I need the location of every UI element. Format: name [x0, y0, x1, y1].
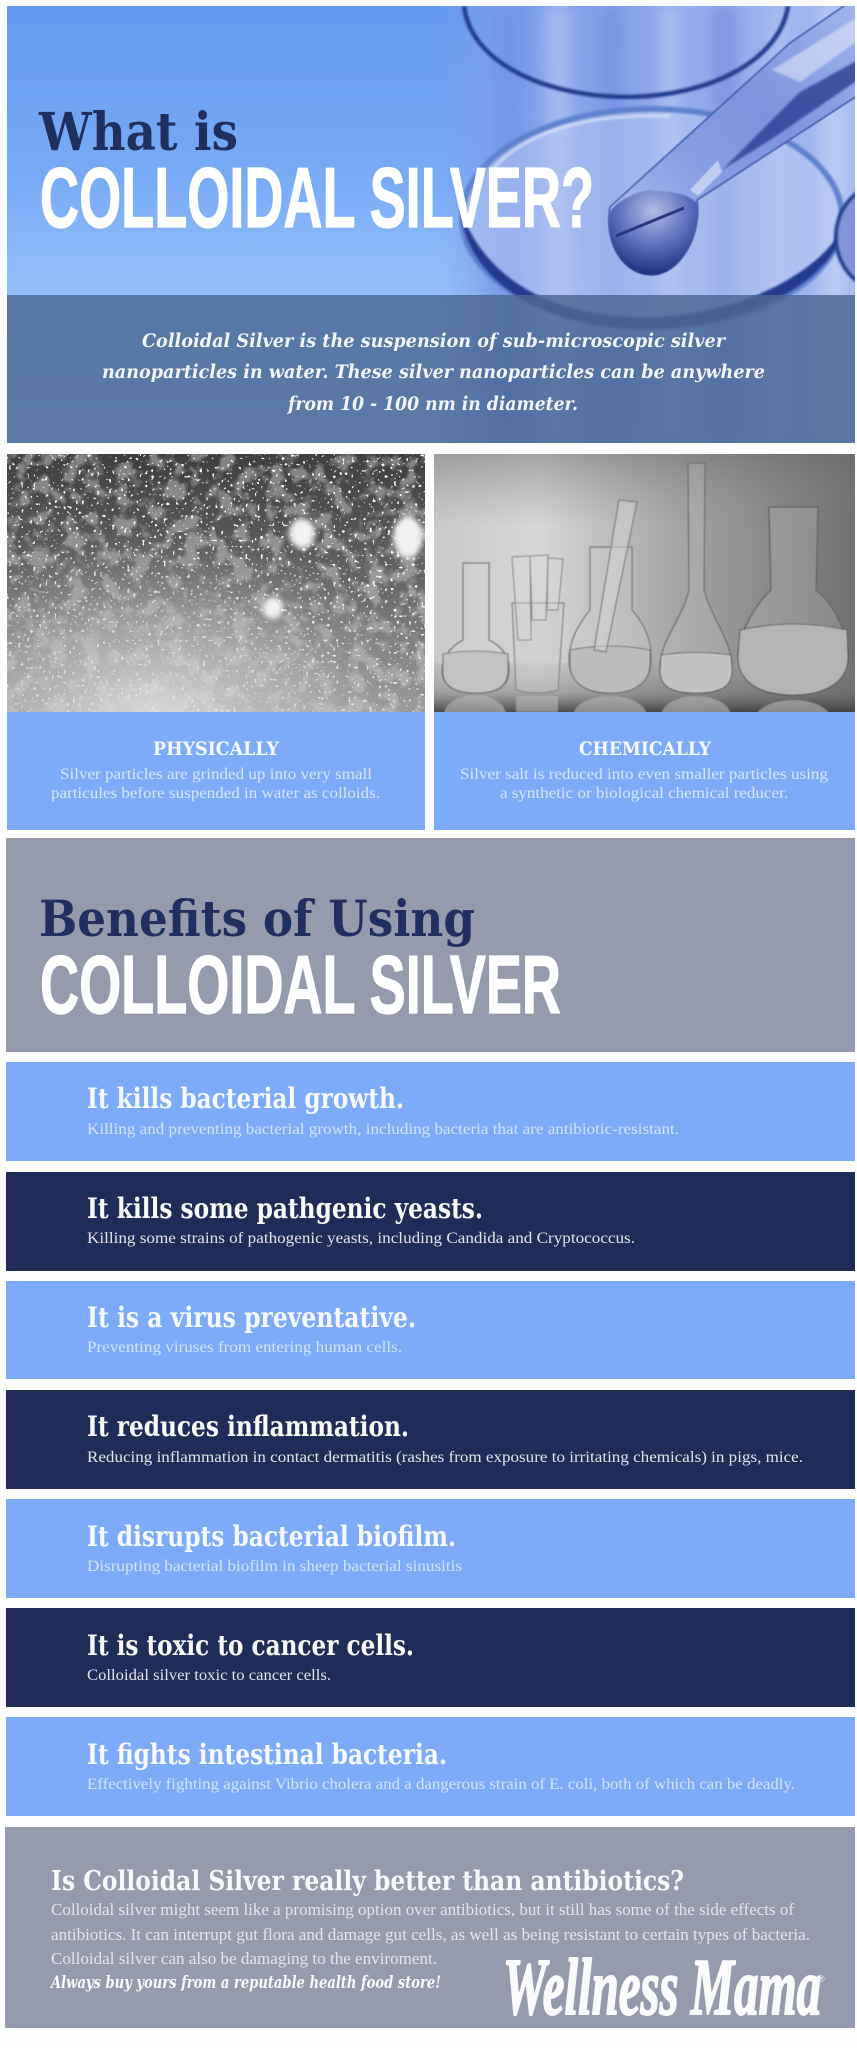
right vessel edge — [836, 185, 857, 289]
caption background — [434, 712, 855, 830]
body text: Colloidal silver can also be damaging to the enviroment. — [51, 1949, 437, 1968]
benefit 7: It fights intestinal bacteria. — [87, 1738, 447, 1771]
photo: silver particles — [7, 454, 425, 712]
flask A — [442, 563, 509, 693]
logo: Wellness Mama: ® — [818, 1974, 825, 1984]
definition text: from 10 - 100 nm in diameter. — [286, 393, 578, 415]
benefit 2: It kills some pathgenic yeasts. — [87, 1192, 483, 1225]
heading: Benefits of Using: Benefits of Using — [39, 889, 475, 948]
benefit 6: Colloidal silver toxic to cancer cells. — [87, 1667, 331, 1684]
panel: chemically — [434, 454, 855, 830]
benefit 2: Killing some strains of pathogenic yeasts, including Candida and Cryptococcus. — [87, 1230, 635, 1247]
translucent caption band — [7, 295, 855, 443]
hero photo: glassware — [7, 0, 857, 443]
body text — [51, 1900, 810, 1968]
heading: Physically: PHYSICALLY — [153, 738, 279, 760]
test tube — [609, 0, 857, 275]
description: a synthetic or biological chemical reducer. — [500, 785, 788, 802]
benefit 1 — [6, 1062, 855, 1161]
benefit 4: It reduces inflammation. — [87, 1410, 409, 1443]
back beaker rim — [464, 6, 788, 97]
benefit 7 — [6, 1717, 855, 1816]
benefit 3: Preventing viruses from entering human cells. — [87, 1339, 402, 1356]
description: Silver salt is reduced into even smaller particles using — [460, 766, 828, 783]
benefit 1: It kills bacterial growth. — [87, 1082, 404, 1115]
benefit 3 — [6, 1281, 855, 1379]
heading: What is: What is — [38, 102, 238, 163]
panel: antibiotics comparison — [5, 1827, 855, 2032]
definition text: nanoparticles in water. These silver nanoparticles can be anywhere — [102, 361, 765, 383]
flask C — [569, 547, 651, 693]
description: particules before suspended in water as colloids. — [51, 785, 380, 802]
body text: Colloidal silver might seem like a promising option over antibiotics, but it still has some of the side effects of — [51, 1900, 794, 1919]
definition text: Colloidal Silver is the suspension of sub-microscopic silver — [142, 330, 727, 352]
flask D — [660, 463, 732, 693]
heading: Chemically: CHEMICALLY — [579, 738, 711, 760]
body text: antibiotics. It can interrupt gut flora and damage gut cells, as well as being resistant to certain types of bacteria. — [51, 1925, 810, 1944]
panel: physically — [7, 454, 425, 830]
benefit 5: It disrupts bacterial biofilm. — [87, 1520, 456, 1553]
call to action: Always buy yours from a reputable health food store! — [49, 1973, 441, 1993]
benefit 1: Killing and preventing bacterial growth, including bacteria that are antibiotic-resistant. — [87, 1121, 679, 1138]
benefit 7: Effectively fighting against Vibrio cholera and a dangerous strain of E. coli, both of which can be deadly. — [87, 1776, 795, 1793]
heading: Colloidal Silver: COLLOIDAL SILVER — [40, 938, 561, 1031]
description — [51, 766, 380, 802]
reflections — [444, 695, 829, 712]
benefit 5: Disrupting bacterial biofilm in sheep bacterial sinusitis — [87, 1558, 462, 1575]
heading: Is Colloidal Silver really better than antibiotics? — [51, 1866, 684, 1897]
description: Silver particles are grinded up into very small — [60, 766, 373, 783]
benefit 4: Reducing inflammation in contact dermatitis (rashes from exposure to irritating chemicals) in pigs, mice. — [87, 1449, 803, 1466]
panel: benefits header — [6, 838, 855, 1052]
front dish — [462, 109, 842, 327]
benefit 6 — [6, 1608, 855, 1707]
benefit 4 — [6, 1390, 855, 1489]
benefit 2 — [6, 1172, 855, 1271]
benefit 6: It is toxic to cancer cells. — [87, 1629, 414, 1662]
benefit 5 — [6, 1499, 855, 1598]
benefit 3: It is a virus preventative. — [87, 1301, 416, 1334]
photo: glass flasks — [434, 454, 855, 712]
test tubes in beaker — [512, 603, 564, 693]
description — [460, 766, 828, 802]
caption background — [7, 712, 425, 830]
panel: hero — [7, 0, 857, 443]
definition text — [102, 330, 765, 415]
flask E — [737, 506, 843, 656]
